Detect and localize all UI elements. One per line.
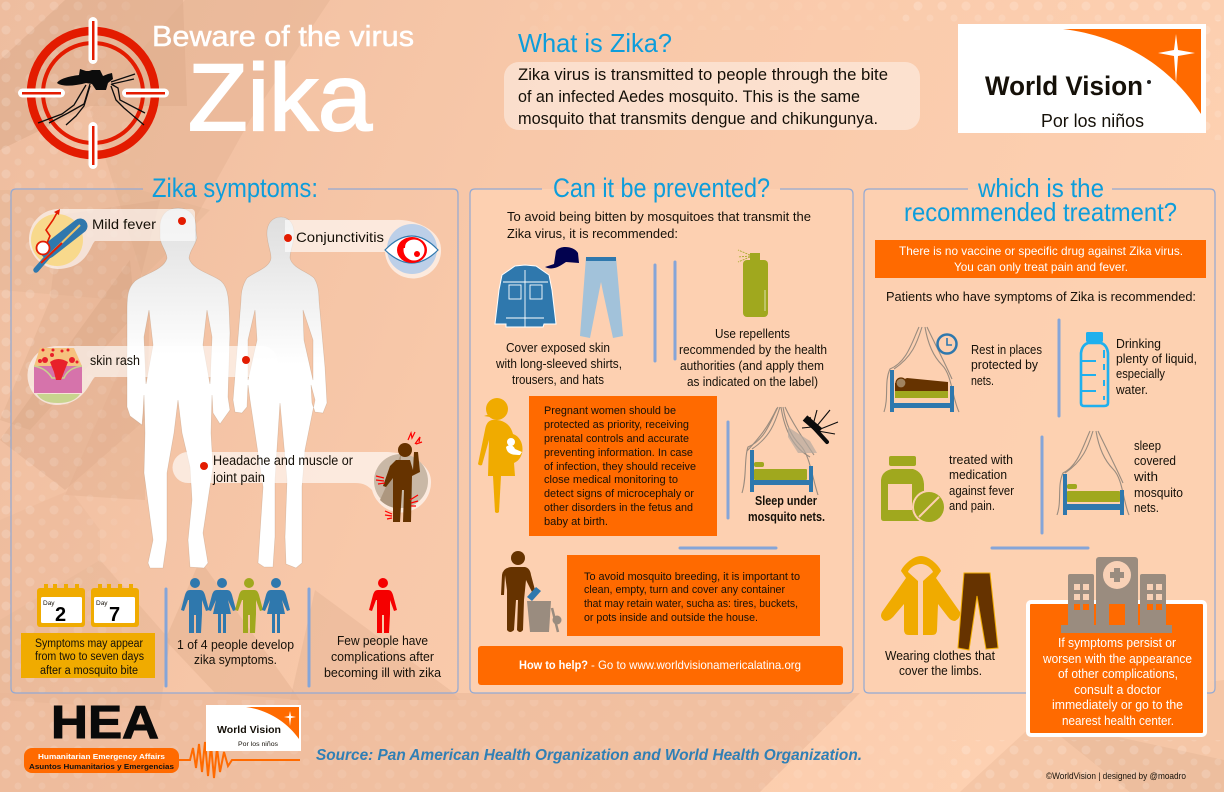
source: Source: Pan American Health Organization and World Health Organization. (316, 747, 862, 764)
box: pregnant women: preventing information. In case (544, 447, 693, 459)
box: how to help: - Go to www.worldvisionamericalatina.org (591, 658, 801, 672)
box: pregnant women (529, 396, 717, 536)
logo: World Vision (958, 24, 1206, 133)
note: symptoms appear: from two to seven days (35, 651, 144, 663)
caption: cover skin (495, 341, 622, 387)
icon: person resting under net (884, 327, 959, 412)
text: medication: and pain. (949, 499, 995, 513)
panel: symptoms (11, 173, 458, 693)
caption: cover skin: with long-sleeved shirts, (495, 357, 622, 371)
icon: medication (881, 456, 946, 524)
text: medication: medication (949, 468, 1007, 482)
text: drinking: plenty of liquid, (1116, 352, 1197, 366)
caption: clothes: cover the limbs. (899, 664, 982, 678)
box: mosquito breeding: clean, empty, turn and cover any container (584, 584, 785, 596)
box: pregnant women: close medical monitoring to (544, 474, 678, 486)
text: rest: protected by (971, 358, 1039, 372)
caption: repellent: Use repellents (715, 327, 790, 341)
heading: treatment: recommended treatment? (904, 197, 1177, 227)
caption: repellent: as indicated on the label) (687, 375, 818, 389)
box: consult a doctor: If symptoms persist or (1058, 636, 1176, 650)
box: pregnant women: baby at birth. (544, 516, 608, 528)
what is zika (504, 28, 920, 130)
logo: small World Vision: World Vision (217, 725, 281, 736)
box: pregnant women: of infection, they should receive (544, 461, 696, 473)
note: symptoms appear (21, 633, 155, 678)
people: complications: becoming ill with zika (324, 665, 442, 680)
icon: water bottle (1081, 332, 1108, 406)
box: pregnant women: prenatal controls and accurate (544, 433, 689, 445)
text: sleep covered: mosquito (1134, 486, 1183, 500)
text: drinking: Drinking (1116, 337, 1161, 351)
caption: clothes: Wearing clothes that (885, 649, 995, 663)
box: pregnant women: protected as priority, receiving (544, 419, 689, 431)
icon: target with mosquito (18, 17, 169, 169)
callout: headache and muscle pain: joint pain (212, 470, 265, 485)
title (152, 21, 414, 151)
logo: World Vision: World Vision (985, 71, 1143, 101)
logo: HEA: HEA (51, 696, 159, 748)
note: symptoms appear: after a mosquito bite (40, 665, 138, 677)
logo: HEA (24, 696, 300, 778)
icon: jacket, cap and jeans (495, 247, 623, 338)
icon: pregnant woman (478, 398, 523, 513)
box: no vaccine: You can only treat pain and fever. (954, 260, 1128, 274)
text: sleep covered: covered (1134, 454, 1176, 468)
callout: mild fever: Mild fever (92, 216, 156, 232)
box: consult a doctor: nearest health center. (1062, 714, 1174, 728)
calendars: Day (43, 600, 55, 607)
text: sleep covered (1133, 439, 1183, 515)
text: medication: against fever (949, 484, 1014, 498)
logo: World Vision: Por los niños (1041, 111, 1144, 131)
text: rest: Rest in places (971, 343, 1042, 357)
icon: skin layers (34, 348, 82, 403)
caption: repellent: recommended by the health (679, 343, 827, 357)
text: sleep covered: sleep (1134, 439, 1161, 453)
box: mosquito breeding: To avoid mosquito breeding, it is important to (584, 571, 800, 583)
box: pregnant women: detect signs of microcephaly or (544, 488, 694, 500)
callout: mild fever (29, 209, 195, 270)
box: pregnant women: Pregnant women should be (544, 405, 676, 417)
callout: skin rash: skin rash (90, 353, 140, 368)
what is zika: mosquito that transmits dengue and chikungunya. (518, 110, 878, 128)
text: medication (949, 453, 1014, 513)
heading: symptoms: Zika symptoms: (152, 173, 318, 203)
icon: man in pain (374, 432, 428, 522)
logo: small World Vision: Por los niños (238, 741, 279, 748)
caption: repellent: authorities (and apply them (680, 359, 824, 373)
heading: treatment (904, 173, 1177, 227)
heading: prevention: Can it be prevented? (553, 173, 770, 203)
silhouette: male (127, 208, 230, 568)
text: sleep covered: nets. (1134, 501, 1159, 515)
box: mosquito breeding: that may retain water, sucha as: tires, buckets, (584, 598, 798, 610)
caption: sleep under nets: mosquito nets. (748, 510, 825, 524)
box: how to help (478, 646, 843, 685)
callout: headache and muscle pain: Headache and muscle or (213, 453, 353, 468)
heading: treatment: which is the (977, 173, 1104, 203)
box: how to help: How to help? (519, 658, 588, 672)
calendars: Day (96, 600, 108, 607)
calendars: 7 (109, 604, 120, 626)
callout: skin rash (27, 346, 277, 405)
icon: repellent (738, 250, 768, 317)
people: complications: Few people have (337, 633, 428, 648)
text: patients: Patients who have symptoms of Zika is recommended: (886, 289, 1196, 304)
callout: conjunctivitis (284, 220, 441, 279)
intro text: Zika virus, it is recommended: (507, 226, 678, 241)
people: complications (324, 578, 442, 680)
title: Beware of the virus (152, 21, 414, 53)
what is zika: Zika virus is transmitted to people through the bite (518, 66, 888, 84)
what is zika: of an infected Aedes mosquito. This is the same (518, 88, 860, 106)
title: Zika (188, 45, 372, 151)
box: pregnant women: other disorders in the fetus and (544, 502, 693, 514)
icon: hospital (1061, 557, 1172, 633)
caption: repellent (679, 327, 827, 389)
what is zika: What is Zika? (518, 28, 672, 58)
callout: conjunctivitis: Conjunctivitis (296, 229, 384, 245)
text: medication: treated with (949, 453, 1013, 467)
text: rest (971, 343, 1042, 388)
panel: prevention (470, 173, 853, 693)
icon: eye (385, 224, 438, 274)
intro text: To avoid being bitten by mosquitoes that transmit the (507, 209, 811, 224)
box: consult a doctor: worsen with the appearance (1042, 652, 1192, 666)
people: 1 of 4: 1 of 4 people develop (177, 637, 294, 652)
logo: HEA: Asuntos Humanitarios y Emergencias (29, 762, 174, 771)
intro text (507, 209, 811, 241)
box: mosquito breeding (567, 555, 820, 636)
people: 1 of 4: zika symptoms. (194, 652, 277, 667)
box: consult a doctor: of other complications, (1058, 667, 1178, 681)
panel: treatment (864, 173, 1215, 693)
logo: small World Vision (206, 705, 301, 751)
icon: bed with net (1057, 431, 1129, 515)
caption: sleep under nets (748, 494, 825, 524)
callout: headache and muscle pain (172, 432, 431, 522)
icon: person using trash bin (501, 551, 562, 632)
credit: ©WorldVision | designed by @moadro (1046, 771, 1186, 782)
icon: thermometer (31, 209, 83, 270)
people: complications: complications after (331, 649, 435, 664)
text: drinking: especially (1116, 367, 1166, 381)
text: rest: nets. (971, 374, 994, 388)
calendars (37, 584, 139, 627)
box: consult a doctor: consult a doctor (1074, 683, 1161, 697)
icon: clock (938, 334, 956, 354)
icon: bed under net with mosquito (742, 407, 838, 495)
box: consult a doctor (1028, 602, 1205, 735)
people: 1 of 4 (177, 578, 294, 667)
caption: clothes (885, 649, 995, 678)
silhouette: female (233, 217, 327, 568)
box: no vaccine: There is no vaccine or specific drug against Zika virus. (899, 244, 1183, 258)
logo: HEA: Humanitarian Emergency Affairs (38, 752, 165, 761)
icon: raincoat and trousers (881, 556, 998, 650)
calendars: 2 (55, 604, 66, 626)
caption: cover skin: trousers, and hats (512, 373, 604, 387)
box: consult a doctor: immediately or go to the (1052, 698, 1183, 712)
text: drinking (1115, 337, 1197, 397)
box: mosquito breeding: or pots inside and outside the house. (584, 612, 758, 624)
caption: cover skin: Cover exposed skin (506, 341, 610, 355)
text: drinking: water. (1115, 383, 1148, 397)
note: symptoms appear: Symptoms may appear (35, 638, 143, 650)
text: sleep covered: with (1133, 470, 1158, 484)
caption: sleep under nets: Sleep under (755, 494, 817, 508)
box: no vaccine (875, 240, 1206, 278)
